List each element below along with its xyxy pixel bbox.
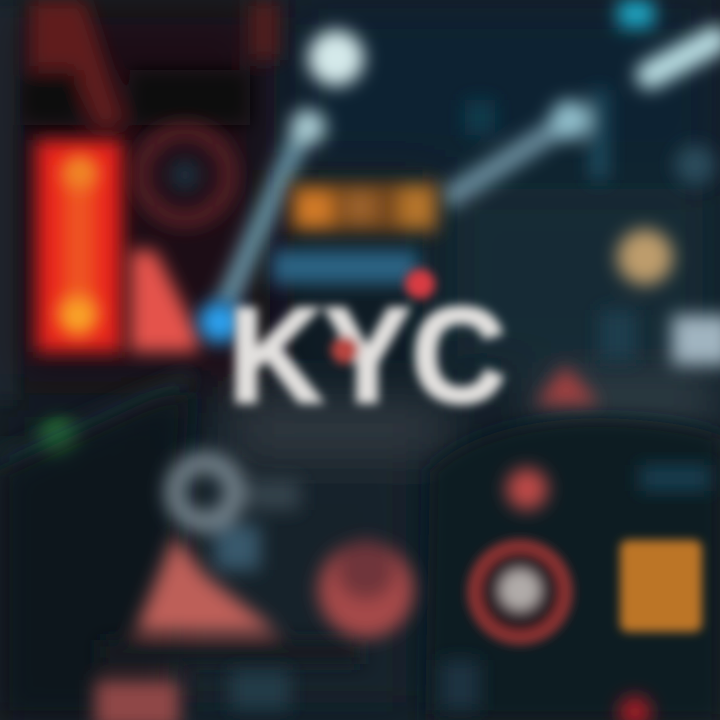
dark control panel <box>425 418 720 720</box>
pink triangle <box>95 535 360 720</box>
neon red sign <box>36 140 122 352</box>
green light <box>41 421 79 459</box>
blue bar <box>272 250 418 284</box>
grey gear icon <box>175 462 300 570</box>
red triangle <box>130 250 198 352</box>
red circular icon <box>141 131 229 219</box>
dark red top left streaks <box>0 0 280 400</box>
dial right <box>474 546 566 638</box>
blue panel glow <box>640 465 710 491</box>
light arrow lines <box>225 0 715 305</box>
orange square button <box>620 540 702 632</box>
bright blue dot <box>198 301 242 343</box>
red small light <box>506 468 548 510</box>
red round dial left <box>318 540 414 638</box>
KYC heading: KYC <box>228 279 506 431</box>
red bottom light <box>230 660 651 720</box>
orange label <box>290 182 438 232</box>
right side lights <box>535 229 720 405</box>
